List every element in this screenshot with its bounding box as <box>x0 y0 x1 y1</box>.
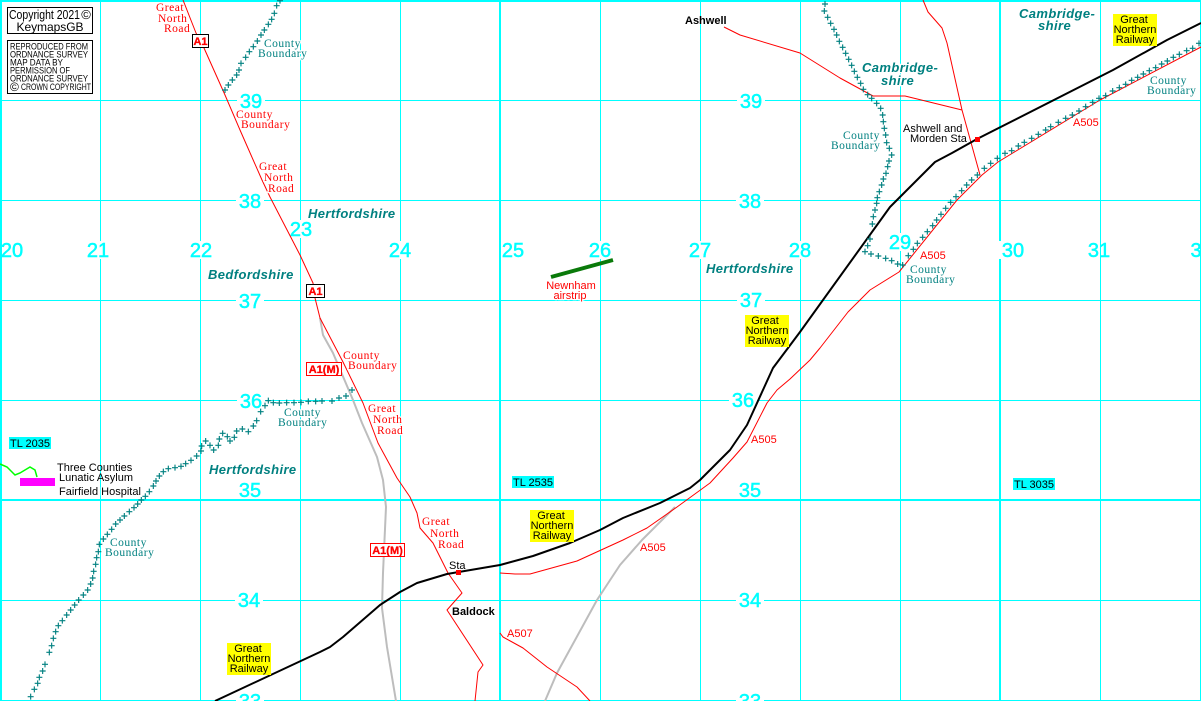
county name: Hertfordshire north: Hertfordshire <box>308 206 396 221</box>
road label: Great North Road at 36: Great <box>368 403 396 415</box>
ordnance survey permission box: CROWN COPYRIGHT <box>21 82 91 93</box>
railway label: south west: Great <box>234 643 262 655</box>
grid labels: northings and eastings: 29 <box>889 232 911 254</box>
road label: Great North Road top: North <box>158 13 187 25</box>
grid labels: northings and eastings: 20 <box>1 240 23 262</box>
grid labels: northings and eastings: 34 <box>739 590 761 612</box>
road shield: A1 south: A1 <box>308 286 323 298</box>
road label: Great North Road top: Great <box>156 2 184 14</box>
road label: Great North Road at Baldock: North <box>430 528 459 540</box>
teal label: County Boundary near Cambridgeshire <box>831 130 880 152</box>
railway label: centre <box>530 510 574 542</box>
railway label: at 37: Railway <box>748 335 787 347</box>
Newnham airstrip label: airstrip <box>553 290 587 302</box>
red label: County Boundary at 39: County <box>236 109 273 121</box>
railway label: at 37: Great <box>751 315 779 327</box>
county name: Cambridgeshire centre <box>862 60 938 88</box>
ordnance survey permission box: REPRODUCED FROM <box>10 42 88 52</box>
Newnham airstrip label: Newnham <box>546 280 596 292</box>
teal label: County Boundary at 36: County <box>284 407 321 419</box>
copyright box: KeymapsGB <box>16 20 84 34</box>
teal label: County Boundary top: Boundary <box>258 48 307 60</box>
hospital label: Three Counties <box>57 462 133 474</box>
station: Ashwell and Morden: Ashwell and <box>903 123 962 135</box>
road: lane to Ashwell and Morden station <box>923 0 980 175</box>
grey road: A1(M) <box>320 318 396 701</box>
grid labels: northings and eastings: 38 <box>239 191 261 213</box>
ordnance survey permission box: ORDNANCE SURVEY <box>10 50 89 60</box>
road label: Great North Road top: Road <box>164 23 190 35</box>
road label: A507: A507 <box>507 628 533 640</box>
place: Baldock: Baldock <box>452 606 496 618</box>
county name: Cambridgeshire centre: shire <box>881 73 914 88</box>
grid labels: northings and eastings: 26 <box>589 240 611 262</box>
road: A507 <box>500 633 590 701</box>
teal label: County Boundary at 36: Boundary <box>278 417 327 429</box>
county boundary: top left <box>225 1 280 90</box>
grid labels: northings and eastings: 24 <box>389 240 411 262</box>
road label: A505 south: A505 <box>640 542 666 554</box>
grid labels: northings and eastings: 35 <box>239 480 261 502</box>
county name: Hertfordshire west: Hertfordshire <box>209 462 297 477</box>
grid labels: northings and eastings: 31 <box>1088 240 1110 262</box>
railway label: north east: Great <box>1120 14 1148 26</box>
railway label: north east: Northern <box>1114 24 1156 36</box>
railway label: south west: Railway <box>230 663 269 675</box>
red label: County Boundary at 37 <box>343 350 397 372</box>
grid labels: northings and eastings: 39 <box>740 91 762 113</box>
grid labels: northings and eastings: 39 <box>240 91 262 113</box>
red label: County Boundary at 37: County <box>343 350 380 362</box>
grey road: Baldock bypass <box>545 507 675 701</box>
ordnance survey permission box: PERMISSION OF <box>10 66 70 76</box>
station: Baldock Sta: Sta <box>449 560 466 572</box>
county name: Cambridgeshire east <box>1019 6 1095 33</box>
road label: A505 at 29: A505 <box>920 250 946 262</box>
teal label: County Boundary far east: County <box>1150 75 1187 87</box>
road label: Great North Road at Baldock: Road <box>438 539 464 551</box>
road shield: A1 north: A1 <box>193 36 208 48</box>
county boundary: south west <box>31 390 352 697</box>
road label: Great North Road at Baldock: Great <box>422 516 450 528</box>
grid labels: northings and eastings: 27 <box>689 240 711 262</box>
grid labels: northings and eastings: 36 <box>732 390 754 412</box>
road: Ashwell lane <box>724 27 962 110</box>
hospital marker and driveway <box>0 464 55 486</box>
grid labels: northings and eastings: 36 <box>240 391 262 413</box>
railway label: north east: Railway <box>1116 34 1155 46</box>
road shield: A1 south <box>306 284 324 298</box>
grid labels: northings and eastings: 23 <box>290 219 312 241</box>
red label: County Boundary at 39: Boundary <box>241 119 290 131</box>
teal label: County Boundary south west <box>105 537 154 559</box>
ordnance survey permission box: ORDNANCE SURVEY <box>10 74 89 84</box>
grid labels: northings and eastings: 38 <box>739 191 761 213</box>
teal label: County Boundary far east: Boundary <box>1147 85 1196 97</box>
road label: Great North Road at 38: Road <box>268 183 294 195</box>
red label: County Boundary at 37: Boundary <box>348 360 397 372</box>
teal label: County Boundary at 36 <box>278 407 327 429</box>
road label: Great North Road at 38 <box>259 161 294 195</box>
red label: County Boundary at 39 <box>236 109 290 131</box>
railway label: centre: Northern <box>531 520 573 532</box>
road label: Great North Road top <box>156 2 190 35</box>
teal label: County Boundary at 29 <box>906 264 955 286</box>
road label: Great North Road at 36 <box>368 403 403 437</box>
teal label: County Boundary at 29: Boundary <box>906 274 955 286</box>
road label: Great North Road at Baldock <box>422 516 464 551</box>
hospital label: Lunatic Asylum <box>59 472 133 484</box>
Newnham airstrip <box>551 260 613 277</box>
railway label: south west: Northern <box>228 653 270 665</box>
copyright box <box>8 7 92 34</box>
grid labels: northings and eastings: 35 <box>739 480 761 502</box>
teal label: County Boundary near Cambridgeshire: Boundary <box>831 140 880 152</box>
road: Great North Road / A1 <box>183 0 483 701</box>
copyright box: © <box>81 7 91 22</box>
road label: Great North Road at 36: North <box>373 414 402 426</box>
county name: Cambridgeshire centre: Cambridge- <box>862 60 938 75</box>
grid labels: northings and eastings: 37 <box>740 290 762 312</box>
road label: Great North Road at 38: Great <box>259 161 287 173</box>
road label: A505 east: A505 <box>1073 117 1099 129</box>
Newnham airstrip label <box>546 280 596 302</box>
road label: A505 at 36: A505 <box>751 434 777 446</box>
ordnance survey permission box: © <box>10 80 19 94</box>
grid reference: TL 3035: TL 3035 <box>1014 479 1054 491</box>
station: Ashwell and Morden: Morden Sta <box>910 133 968 145</box>
railway label: at 37: Northern <box>746 325 788 337</box>
teal label: County Boundary top <box>258 38 307 60</box>
railway label: north east <box>1113 14 1157 46</box>
grid labels: northings and eastings: 22 <box>190 240 212 262</box>
teal label: County Boundary south west: County <box>110 537 147 549</box>
grid labels: northings and eastings: 25 <box>502 240 524 262</box>
place: Ashwell: Ashwell <box>685 15 727 27</box>
road: A505 west section <box>500 47 1201 574</box>
grid labels: northings and eastings: 30 <box>1002 240 1024 262</box>
road label: Great North Road at 36: Road <box>377 425 403 437</box>
grid reference: TL 2535: TL 2535 <box>513 477 553 489</box>
road shield: A1(M) south: A1(M) <box>372 545 403 557</box>
railway label: at 37 <box>745 315 789 347</box>
hospital label <box>57 462 141 498</box>
county name: Hertfordshire east: Hertfordshire <box>706 261 794 276</box>
grid labels: northings and eastings: 34 <box>238 590 260 612</box>
railway label: centre: Great <box>537 510 565 522</box>
teal label: County Boundary at 29: County <box>910 264 947 276</box>
hospital label: Fairfield Hospital <box>59 486 141 498</box>
teal label: County Boundary south west: Boundary <box>105 547 154 559</box>
ordnance survey permission box <box>8 40 92 94</box>
grid reference: TL 2035: TL 2035 <box>10 438 50 450</box>
copyright box: Copyright 2021 <box>9 8 80 22</box>
county name: Bedfordshire: Bedfordshire <box>208 267 294 282</box>
grid labels: northings and eastings: 37 <box>239 291 261 313</box>
county boundary: east <box>824 4 1199 265</box>
county name: Cambridgeshire east: shire <box>1038 18 1071 33</box>
grid labels: northings and eastings: 28 <box>789 240 811 262</box>
road shield: A1(M) north: A1(M) <box>309 364 340 376</box>
railway label: south west <box>227 643 271 675</box>
railway label: centre: Railway <box>533 530 572 542</box>
railway: Great Northern Railway <box>215 23 1201 701</box>
teal label: County Boundary far east <box>1147 75 1196 97</box>
teal label: County Boundary near Cambridgeshire: County <box>843 130 880 142</box>
grid labels: northings and eastings: 21 <box>87 240 109 262</box>
county name: Cambridgeshire east: Cambridge- <box>1019 6 1095 21</box>
teal label: County Boundary top: County <box>264 38 301 50</box>
station: Ashwell and Morden <box>903 123 980 145</box>
ordnance survey permission box: MAP DATA BY <box>10 58 64 68</box>
road label: Great North Road at 38: North <box>264 172 293 184</box>
